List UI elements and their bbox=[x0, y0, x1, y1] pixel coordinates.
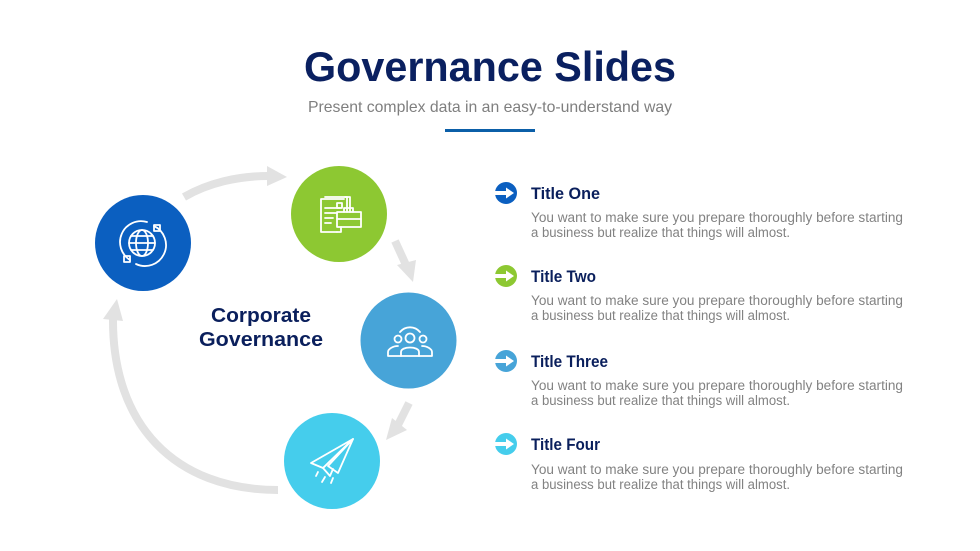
item: Title Three bbox=[494, 350, 903, 408]
icon: arrow bullet green bbox=[494, 265, 517, 287]
icon: paper plane bbox=[311, 439, 353, 483]
arrow: mid blue to cyan bbox=[386, 403, 409, 440]
item: Title One: Title One bbox=[531, 184, 600, 203]
icon: globe bbox=[120, 221, 166, 266]
item: Title Two: Title Two bbox=[531, 267, 596, 286]
center label: Corporate bbox=[211, 305, 311, 327]
icon: people bbox=[388, 327, 432, 356]
icon: arrow bullet cyan bbox=[494, 433, 517, 455]
title: Governance Slides bbox=[304, 43, 676, 90]
node: team bbox=[360, 292, 456, 388]
item: Title Three: You want to make sure you prepare thoroughly before starting bbox=[531, 378, 903, 393]
item: Title Four bbox=[494, 433, 903, 492]
arrow: cyan back to blue bbox=[103, 299, 278, 490]
node: documents bbox=[291, 166, 387, 262]
item: Title Two: You want to make sure you prepare thoroughly before starting bbox=[531, 293, 903, 308]
item: Title Two: a business but realize that things will almost. bbox=[531, 308, 790, 323]
item: Title One: You want to make sure you prepare thoroughly before starting bbox=[531, 210, 903, 225]
node: paper plane bbox=[284, 413, 380, 509]
arrow: blue to green bbox=[184, 166, 287, 197]
icon: arrow bullet mid blue bbox=[494, 350, 517, 372]
icon: arrow bullet blue bbox=[494, 182, 517, 204]
item: Title Three: Title Three bbox=[531, 352, 608, 371]
center label: Governance bbox=[199, 329, 323, 351]
item: Title Three: a business but realize that things will almost. bbox=[531, 393, 790, 408]
center label bbox=[199, 305, 323, 351]
item: Title Four: You want to make sure you prepare thoroughly before starting bbox=[531, 462, 903, 477]
item: Title One: a business but realize that things will almost. bbox=[531, 225, 790, 240]
item: Title Two bbox=[494, 265, 903, 323]
arrow: green to mid blue bbox=[395, 241, 416, 282]
subtitle: Present complex data in an easy-to-understand way bbox=[308, 99, 672, 116]
item: Title Four: Title Four bbox=[531, 435, 600, 454]
item: Title One bbox=[494, 182, 903, 240]
item: Title Four: a business but realize that things will almost. bbox=[531, 477, 790, 492]
node: globe bbox=[95, 195, 191, 291]
title underline bbox=[445, 129, 535, 132]
icon: document and briefcase bbox=[321, 197, 361, 232]
